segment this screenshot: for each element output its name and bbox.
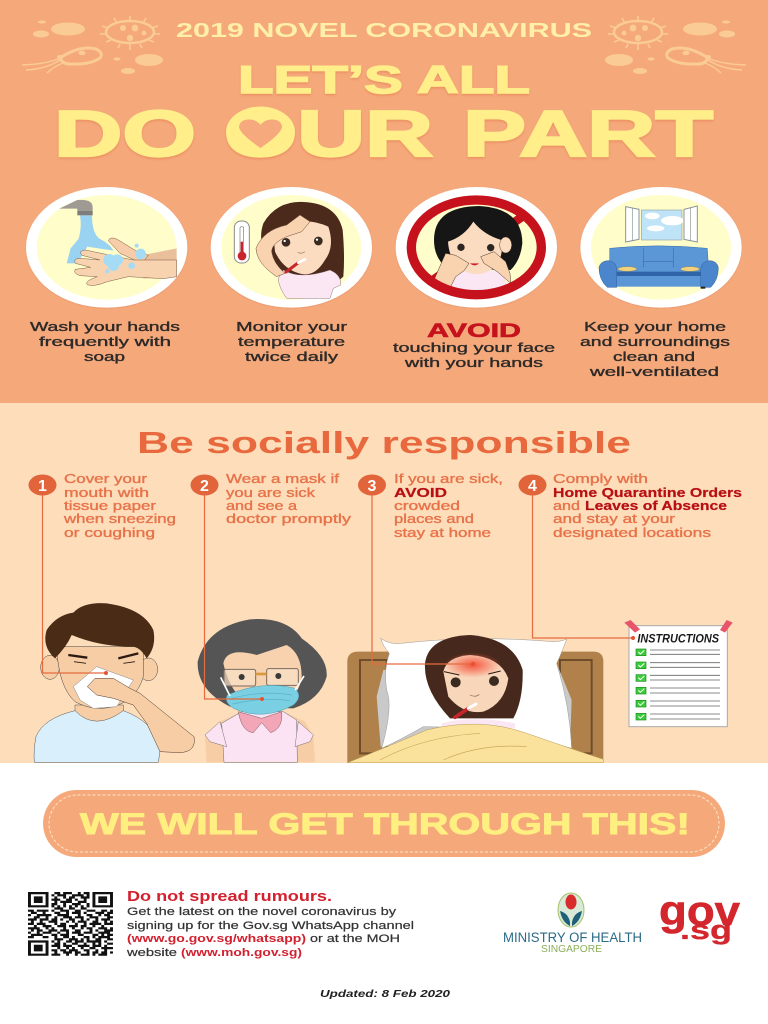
text: monitor temperature caption bbox=[236, 320, 347, 364]
panel: avoid touching face bbox=[393, 187, 557, 370]
text: step 1: tissue paper bbox=[64, 499, 156, 513]
text: wash hands caption bbox=[30, 320, 180, 364]
text: monitor temperature caption: temperature bbox=[238, 335, 345, 349]
text: wash hands caption: soap bbox=[84, 350, 125, 364]
text: clean home caption bbox=[580, 320, 730, 379]
icon: virus decoration right bbox=[605, 16, 746, 74]
heading: be socially responsible: Be socially responsible bbox=[137, 425, 631, 460]
text: step 4: and bbox=[553, 499, 580, 513]
text: step 3: AVOID bbox=[394, 486, 447, 500]
icon: number 2 bbox=[190, 474, 218, 496]
title: let's all do our part: LET’S ALL bbox=[238, 59, 530, 102]
panel: footer background bbox=[0, 763, 768, 1024]
icon: monitor temperature badge bbox=[211, 187, 372, 308]
icon: no touching face badge bbox=[396, 187, 557, 308]
icon: QR code bbox=[28, 892, 113, 956]
text: step 2: doctor promptly bbox=[226, 512, 352, 526]
illustration: man sneezing bbox=[34, 603, 194, 762]
logo: ministry of health singapore: SINGAPORE bbox=[541, 944, 602, 955]
text: step 1: Cover your bbox=[64, 472, 147, 486]
illustration: sick person in bed bbox=[347, 635, 603, 763]
text: step 2: and see a bbox=[226, 499, 297, 513]
text: touching face caption: with your hands bbox=[403, 356, 543, 370]
step 4: comply with orders bbox=[518, 472, 742, 540]
text: do not spread rumours: (www.go.gov.sg/whatsapp) bbox=[127, 933, 306, 945]
icon: virus decoration left bbox=[22, 16, 163, 74]
icon: number 4 bbox=[518, 474, 546, 496]
text: do not spread rumours: Get the latest on the novel coronavirus by bbox=[127, 906, 397, 918]
icon: sofa and window badge bbox=[580, 187, 742, 308]
step 2: wear a mask bbox=[190, 472, 352, 526]
text: do not spread rumours: or at the MOH bbox=[310, 933, 400, 945]
text: updated date: Updated: 8 Feb 2020 bbox=[320, 988, 450, 1000]
text: touching face caption: touching your face bbox=[393, 341, 555, 355]
banner: we will get through this bbox=[43, 790, 725, 857]
text: step 1: when sneezing bbox=[63, 512, 176, 526]
text: step 4: and stay at your bbox=[553, 512, 675, 526]
title: let's all do our part: PART bbox=[463, 97, 713, 170]
text: do not spread rumours: Do not spread rumours. bbox=[127, 888, 332, 905]
title: let's all do our part: DO bbox=[54, 97, 196, 170]
logo: ministry of health singapore: MINISTRY OF HEALTH bbox=[503, 930, 642, 945]
step 3: stay home if sick bbox=[358, 472, 503, 540]
text: wash hands caption: Wash your hands bbox=[30, 320, 180, 334]
text: do not spread rumours bbox=[126, 888, 414, 959]
text: instructions: INSTRUCTIONS bbox=[637, 632, 719, 646]
text: clean home caption: well-ventilated bbox=[588, 365, 719, 379]
logo: gov.sg: gov bbox=[659, 887, 741, 934]
text: step 4: Home Quarantine Orders bbox=[553, 486, 742, 500]
banner: we will get through this: WE WILL GET THROUGH THIS! bbox=[80, 808, 690, 841]
icon: number 3: 3 bbox=[368, 478, 377, 495]
text: step 1 bbox=[63, 472, 176, 540]
text: step 4: Comply with bbox=[553, 472, 648, 486]
text: step 3 bbox=[394, 472, 503, 540]
text: do not spread rumours: website bbox=[126, 947, 177, 959]
text: monitor temperature caption: twice daily bbox=[245, 350, 339, 364]
text: step 4: designated locations bbox=[553, 526, 711, 540]
panel: header background bbox=[0, 0, 768, 403]
text: avoid label: AVOID bbox=[427, 321, 521, 342]
icon: number 4: 4 bbox=[528, 478, 537, 495]
text: step 2: Wear a mask if bbox=[226, 472, 340, 486]
text: step 2: you are sick bbox=[226, 486, 316, 500]
heading: 2019 novel coronavirus: 2019 NOVEL CORONAVIRUS bbox=[176, 20, 592, 42]
icon: number 3 bbox=[358, 474, 386, 496]
text: clean home caption: clean and bbox=[613, 350, 695, 364]
text: step 2 bbox=[226, 472, 352, 526]
panel: clean home bbox=[580, 187, 742, 379]
callout: step connector lines bbox=[42, 495, 633, 699]
text: clean home caption: and surroundings bbox=[580, 335, 730, 349]
text: step 3: If you are sick, bbox=[394, 472, 503, 486]
text: step 1: or coughing bbox=[64, 526, 155, 540]
text: wash hands caption: frequently with bbox=[39, 335, 171, 349]
text: step 3: stay at home bbox=[394, 526, 491, 540]
panel: wash hands bbox=[26, 187, 187, 364]
title: let's all do our part: OUR bbox=[224, 97, 433, 170]
step 1: cover mouth bbox=[28, 472, 176, 540]
text: step 4 bbox=[553, 472, 742, 540]
logo: ministry of health singapore bbox=[503, 893, 642, 955]
panel: socially responsible background bbox=[0, 403, 768, 763]
text: step 3: places and bbox=[394, 512, 474, 526]
illustration: woman with mask bbox=[198, 619, 327, 762]
text: do not spread rumours: (www.moh.gov.sg) bbox=[181, 947, 302, 959]
illustration: instructions sheet bbox=[624, 620, 733, 727]
icon: number 1 bbox=[28, 474, 56, 496]
text: do not spread rumours: signing up for the Gov.sg WhatsApp channel bbox=[127, 920, 414, 932]
text: step 1: mouth with bbox=[64, 486, 149, 500]
icon: number 1: 1 bbox=[38, 478, 47, 495]
logo: gov.sg: .sg bbox=[680, 915, 732, 945]
text: monitor temperature caption: Monitor your bbox=[236, 320, 347, 334]
callout: connector dots bbox=[104, 636, 635, 701]
panel: monitor temperature bbox=[211, 187, 372, 364]
text: step 3: crowded bbox=[394, 499, 460, 513]
title: let's all do our part bbox=[54, 59, 713, 170]
icon: wash hands badge bbox=[26, 187, 187, 308]
text: clean home caption: Keep your home bbox=[584, 320, 726, 334]
icon: number 2: 2 bbox=[200, 478, 209, 495]
text: step 4: Leaves of Absence bbox=[585, 499, 727, 513]
text: touching face caption bbox=[393, 341, 555, 370]
